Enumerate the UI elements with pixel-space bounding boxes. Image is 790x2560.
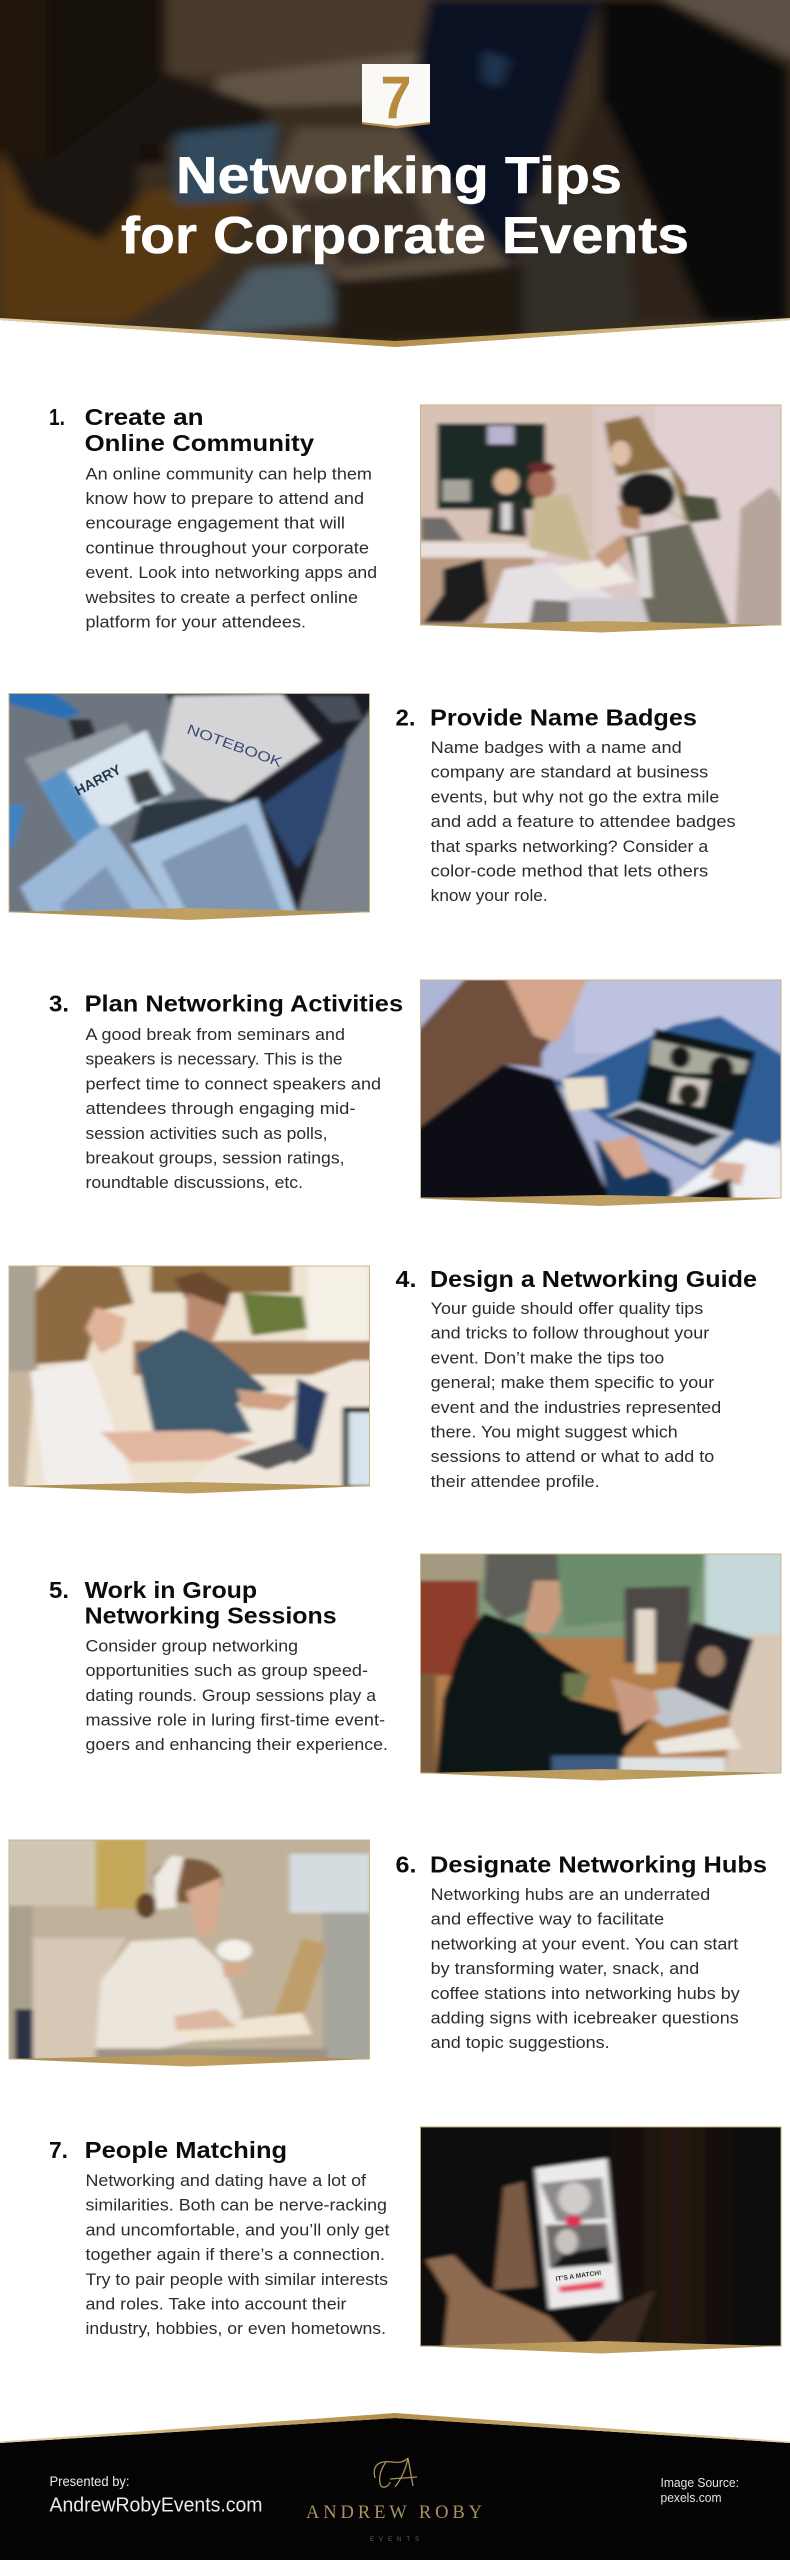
tip 2 body: events, but why not go the extra mile [431,788,719,806]
tip 7 body: Try to pair people with similar interests [86,2271,388,2289]
tip 6: designate networking hubs [0,1834,767,2066]
tip 4 body: their attendee profile. [431,1473,600,1491]
tip 4 body: and tricks to follow throughout your [431,1325,710,1343]
tip 1 heading: 1. [49,404,65,430]
presented by: AndrewRobyEvents.com [50,2494,262,2517]
tip 5 body: goers and enhancing their experience. [86,1736,388,1754]
tip 1 heading [49,404,314,456]
tip 3 heading: Plan Networking Activities [85,990,403,1016]
tip 1 body: encourage engagement that will [86,515,345,533]
tip 3 body: session activities such as polls, [86,1125,328,1143]
photo text: match screen: IT’S A MATCH! [555,2270,602,2283]
tip 2 body [431,739,736,905]
presented by [50,2474,262,2517]
tip 7 body: Networking and dating have a lot of [86,2172,366,2190]
tip 3: plan networking activities [49,975,790,1206]
tip 1 gold accent [420,621,782,632]
tip 5: work in group networking sessions [49,1549,790,1780]
tip 6 body: and topic suggestions. [431,2034,610,2052]
tip 6 body: adding signs with icebreaker questions [431,2010,739,2028]
header photo: laptop on a table, darkened [0,0,790,369]
tip 2 body: that sparks networking? Consider a [431,838,709,856]
tip 7: people matching [49,2122,790,2354]
tip 4 body: event. Don’t make the tips too [431,1349,664,1367]
tip 7 gold accent [420,2341,782,2354]
tip 5 heading: Work in Group [85,1577,257,1603]
tip 3 photo: woman on a video call [413,975,790,1206]
tip 5 heading: 5. [49,1577,69,1603]
tip 7 body: similarities. Both can be nerve-racking [86,2197,387,2215]
tip 5 body [86,1637,388,1754]
tip 2 body: and add a feature to attendee badges [431,813,736,831]
tip 7 heading: People Matching [85,2137,287,2163]
tip 1 body: event. Look into networking apps and [86,564,377,582]
tip 1 body: platform for your attendees. [86,614,306,632]
tip 1 body: know how to prepare to attend and [86,490,364,508]
tip 6 body: by transforming water, snack, and [431,1960,699,1978]
tip 2 body: know your role. [431,887,548,905]
header white cut-out under chevron [0,320,790,352]
tip 2 photo: conference badge and programs [0,687,378,920]
tip 6 body: coffee stations into networking hubs by [431,1985,741,2003]
tip 4 body [431,1300,721,1491]
tip 3 body: A good break from seminars and [86,1026,345,1044]
logo: Andrew Roby Events: EVENTS [370,2537,419,2543]
tip 6 gold accent [9,2055,370,2066]
tip 3 body: speakers is necessary. This is the [86,1051,342,1069]
tip 3 body: breakout groups, session ratings, [86,1150,344,1168]
image source [660,2475,739,2505]
tip 1 body: continue throughout your corporate [86,539,369,557]
tip 1 body [84,465,377,632]
tip 3 body: attendees through engaging mid- [86,1100,356,1118]
tip 4 gold accent [9,1482,370,1494]
footer [0,2413,790,2560]
tip 6 heading: Designate Networking Hubs [430,1852,767,1878]
tip 1 photo: team around a table [413,400,790,632]
tip 6 body: and effective way to facilitate [431,1911,664,1929]
tip 2 body: Name badges with a name and [431,739,682,757]
header gold chevron edge [0,318,790,347]
number badge: 7 [380,64,412,131]
tip 3 body: perfect time to connect speakers and [86,1075,381,1093]
tip 3 body [86,1026,381,1192]
tip 7 body: industry, hobbies, or even hometowns. [86,2320,386,2338]
tip 4 photo: two people working on laptops [0,1261,378,1494]
logo monogram [374,2458,417,2487]
logo: Andrew Roby Events [306,2458,482,2543]
footer black panel [0,2418,790,2560]
tip 3 body: roundtable discussions, etc. [86,1174,303,1192]
tip 7 body: and roles. Take into account their [86,2296,347,2314]
tip 4 body: Your guide should offer quality tips [431,1300,703,1318]
tip 5 heading: Networking Sessions [85,1603,337,1629]
tip 6 body: Networking hubs are an underrated [431,1886,710,1904]
tip 5 body: massive role in luring first-time event- [86,1712,385,1730]
tip 4 body: sessions to attend or what to add to [431,1448,714,1466]
tip 6 body [431,1886,741,2052]
tip 5 body: dating rounds. Group sessions play a [86,1687,377,1705]
tip 6 body: networking at your event. You can start [431,1935,739,1953]
title: for Corporate Events [121,207,689,265]
tip 4 body: there. You might suggest which [431,1424,678,1442]
tip 7 body: and uncomfortable, and you’ll only get [86,2221,390,2239]
tip 7 heading: 7. [49,2137,68,2163]
tip 2 gold accent [9,908,370,920]
tip 7 body [86,2172,390,2338]
tip 1 heading: Create an [85,404,204,430]
number badge [362,64,430,131]
tip 4: design a networking guide [0,1261,757,1494]
tip 2: provide name badges [0,687,736,920]
tip 5 body: opportunities such as group speed- [86,1662,368,1680]
tip 6 heading: 6. [396,1852,416,1878]
tip 5 heading [49,1577,337,1629]
tip 1 body: An online community can help them [86,465,372,483]
header banner [0,0,790,369]
tip 4 heading: Design a Networking Guide [430,1266,757,1292]
photo text: notebook: NOTEBOOK [185,721,285,770]
tip 5 gold accent [420,1769,782,1780]
image source: pexels.com [660,2490,722,2505]
tip 4 heading: 4. [396,1266,416,1292]
tip 1 heading: Online Community [85,430,314,456]
title: Networking Tips [176,147,622,205]
tip 3 gold accent [420,1195,782,1206]
tip 1: create an online community [49,400,790,632]
tip 6 photo: woman with headphones and coffee [0,1834,378,2066]
tip 1 body: websites to create a perfect online [84,589,358,607]
image source: Image Source: [660,2475,739,2490]
tip 2 heading: 2. [396,705,416,731]
tip 3 heading: 3. [49,990,69,1016]
tip 7 photo: hand holding a phone with a match screen [413,2122,790,2354]
tip 2 body: company are standard at business [431,764,708,782]
tip 5 body: Consider group networking [86,1637,298,1655]
tip 4 body: general; make them specific to your [431,1374,715,1392]
tip 2 body: color-code method that lets others [431,862,708,880]
title [121,147,689,265]
tip 5 photo: man on a video call at a desk [413,1549,790,1780]
photo text: badge name: HARRY [72,761,124,799]
tip 7 body: together again if there’s a connection. [86,2246,385,2264]
tip 2 heading: Provide Name Badges [430,705,697,731]
footer gold chevron edge [0,2413,790,2443]
presented by: Presented by: [50,2474,130,2489]
tip 4 body: event and the industries represented [431,1399,721,1417]
logo: Andrew Roby Events: ANDREW ROBY [306,2503,482,2523]
